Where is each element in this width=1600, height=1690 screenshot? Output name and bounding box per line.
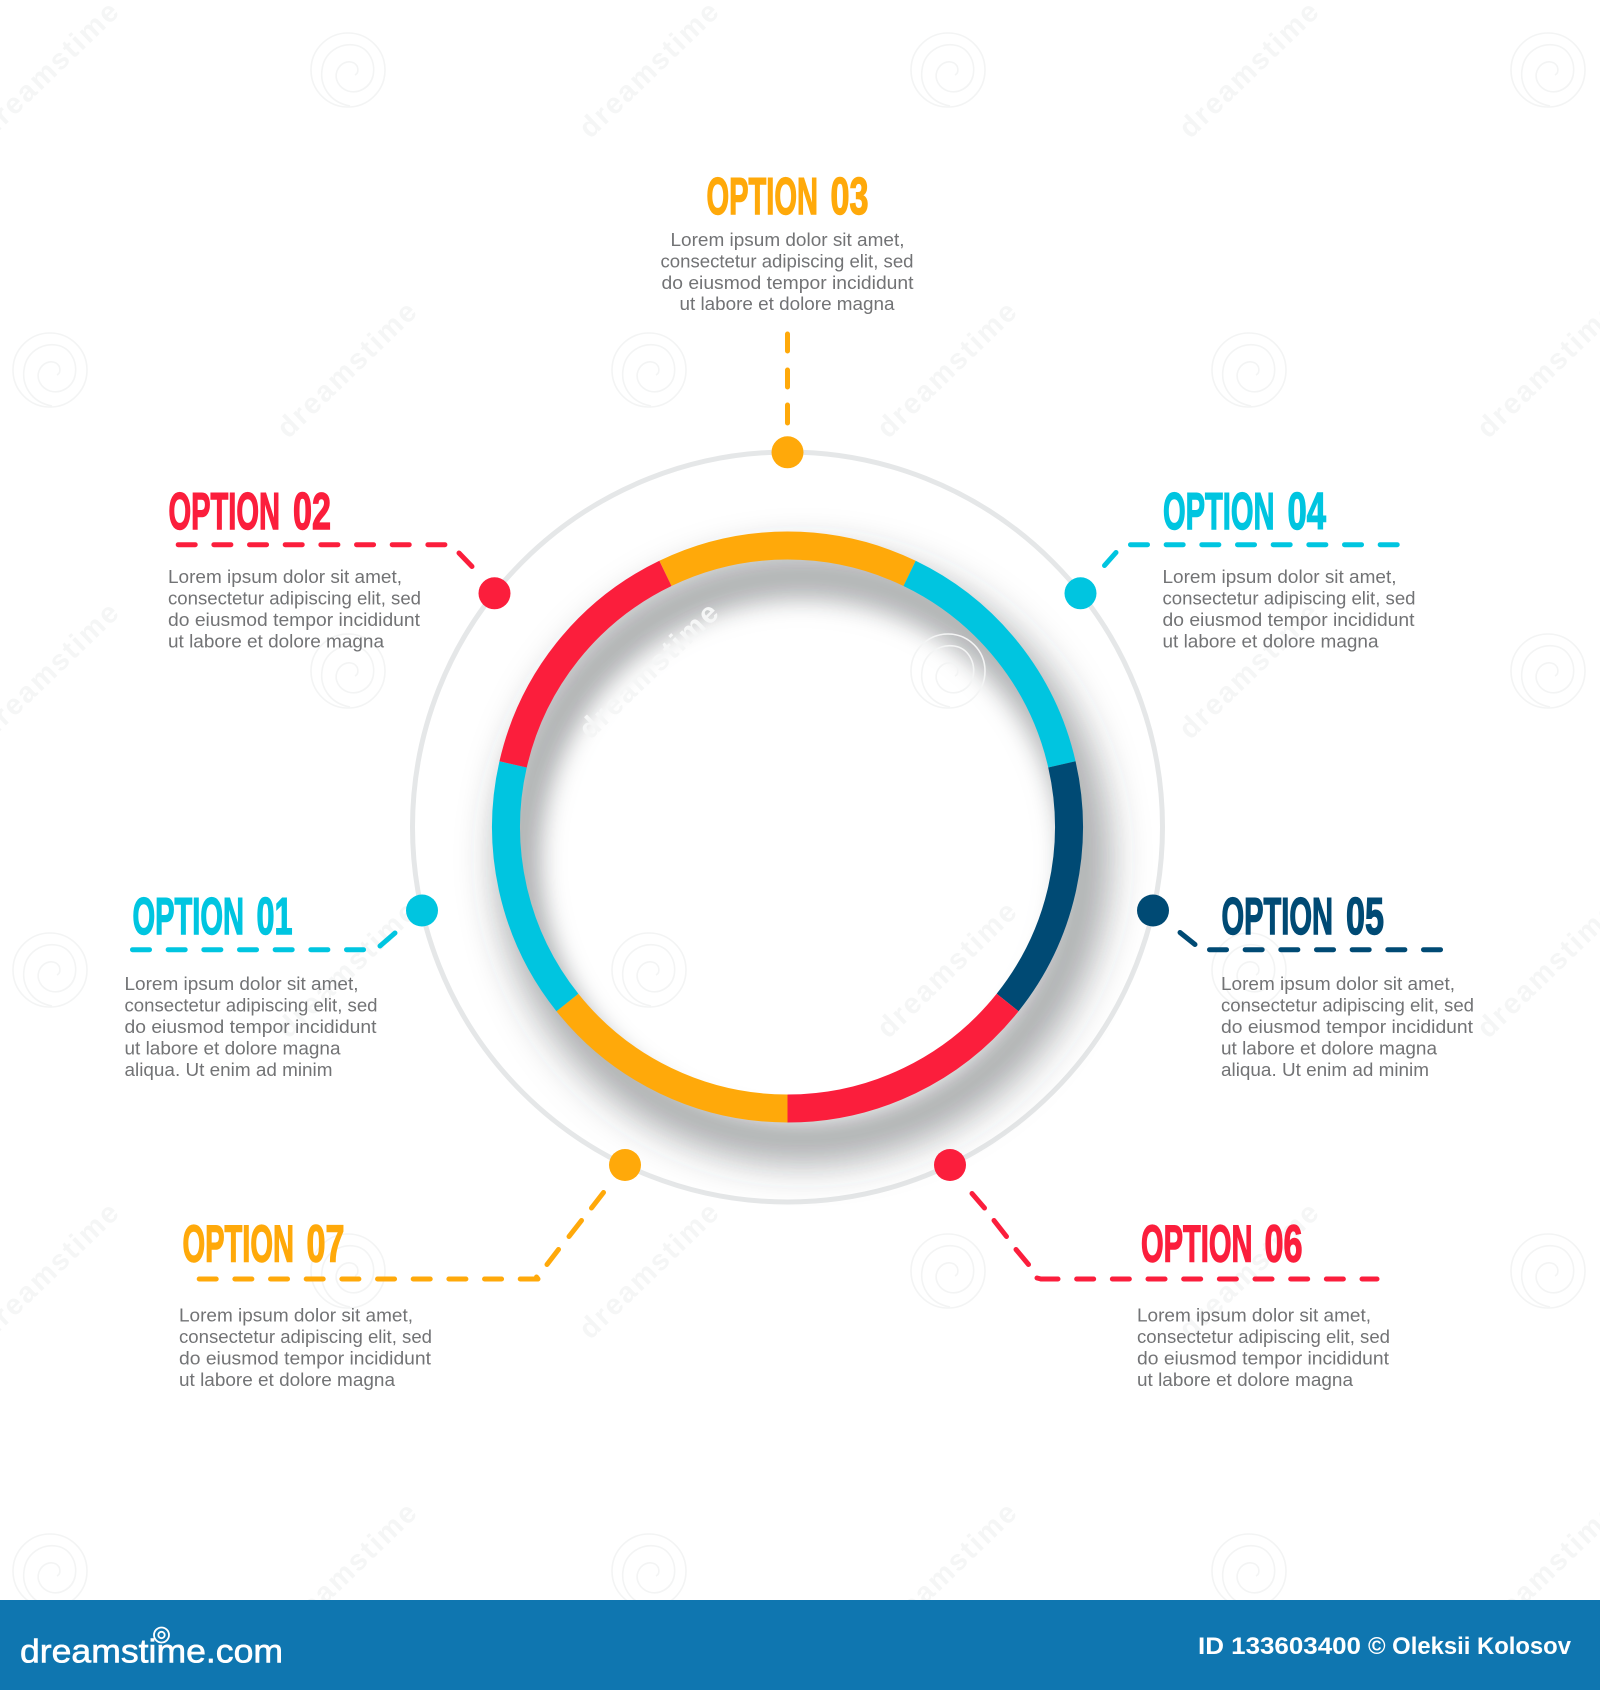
- segment: option 01: [506, 764, 567, 1002]
- connector: option 04: [1104, 545, 1399, 566]
- heading: option 07: OPTION: [182, 1214, 294, 1272]
- panel: option 07: [179, 1149, 641, 1390]
- text block: option 05: [1221, 973, 1474, 1080]
- text block: option 04: consectetur adipiscing elit, sed: [1162, 588, 1416, 608]
- heading: option 06: 06: [1264, 1214, 1302, 1272]
- panel: option 06: [934, 1149, 1390, 1390]
- heading: option 04: 04: [1288, 482, 1326, 540]
- heading: option 06: OPTION: [1141, 1214, 1252, 1272]
- text block: option 07: consectetur adipiscing elit, sed: [179, 1326, 432, 1347]
- heading: option 05: 05: [1346, 887, 1384, 945]
- text block: option 06: consectetur adipiscing elit, sed: [1137, 1326, 1390, 1347]
- text block: option 01: do eiusmod tempor incididunt: [124, 1016, 377, 1037]
- heading: option 02: OPTION: [168, 482, 280, 540]
- panel: option 04: [1064, 482, 1416, 652]
- connector: option 06: [972, 1194, 1377, 1279]
- text block: option 05: aliqua. Ut enim ad minim: [1221, 1059, 1429, 1080]
- heading: option 01: 01: [256, 887, 292, 945]
- text block: option 03: consectetur adipiscing elit, sed: [660, 250, 914, 272]
- icon: logo spiral: [154, 1628, 169, 1642]
- heading: option 05: OPTION: [1222, 887, 1333, 945]
- image credit: ID 133603400: [1198, 1633, 1361, 1660]
- segmented ring: [506, 546, 1069, 1109]
- dot: option 04: [1064, 577, 1096, 609]
- footer banner: [0, 1600, 1600, 1690]
- text block: option 03: Lorem ipsum dolor sit amet,: [670, 229, 904, 250]
- connector: option 02: [178, 545, 472, 566]
- text block: option 07: do eiusmod tempor incididunt: [179, 1348, 432, 1368]
- panel: option 05: [1137, 887, 1474, 1080]
- connector: option 03: [785, 334, 790, 423]
- segment: option 03: [665, 546, 910, 573]
- connector: option 05: [1180, 932, 1442, 950]
- text block: option 07: Lorem ipsum dolor sit amet,: [179, 1304, 413, 1326]
- text block: option 01: Lorem ipsum dolor sit amet,: [124, 973, 358, 994]
- text block: option 03: do eiusmod tempor incididunt: [662, 272, 914, 293]
- text block: option 06: Lorem ipsum dolor sit amet,: [1137, 1304, 1371, 1326]
- text block: option 02: [168, 566, 421, 652]
- text block: option 01: consectetur adipiscing elit, sed: [124, 994, 378, 1016]
- image credit: © Oleksii Kolosov: [1368, 1633, 1571, 1660]
- heading: option 07: 07: [306, 1214, 344, 1272]
- segment: option 05: [1008, 764, 1069, 1002]
- segment: option 06: [788, 1002, 1008, 1109]
- connector: option 01: [132, 933, 395, 950]
- segment: option 02: [513, 573, 665, 764]
- panel: option 02: [168, 482, 510, 652]
- text block: option 04: Lorem ipsum dolor sit amet,: [1162, 566, 1396, 587]
- text block: option 05: do eiusmod tempor incididunt: [1221, 1016, 1474, 1037]
- text block: option 04: [1162, 566, 1416, 652]
- ring shadow: [522, 576, 1084, 1138]
- dot: option 05: [1137, 894, 1169, 926]
- heading: option 03: 03: [830, 167, 868, 225]
- heading: option 01: OPTION: [132, 887, 244, 945]
- connector: option 07: [199, 1192, 603, 1279]
- text block: option 01: [124, 973, 378, 1080]
- text block: option 02: do eiusmod tempor incididunt: [168, 609, 421, 630]
- text block: option 07: ut labore et dolore magna: [179, 1369, 396, 1390]
- heading: option 02: 02: [293, 482, 331, 540]
- segment: option 04: [910, 573, 1062, 764]
- text block: option 05: ut labore et dolore magna: [1221, 1038, 1438, 1058]
- text block: option 01: ut labore et dolore magna: [124, 1038, 341, 1058]
- dot: option 07: [609, 1149, 641, 1181]
- dot: option 02: [478, 577, 510, 609]
- text block: option 06: ut labore et dolore magna: [1137, 1369, 1354, 1390]
- text block: option 02: Lorem ipsum dolor sit amet,: [168, 566, 402, 587]
- logo: dreamstime.com: dreamstime.com: [20, 1632, 283, 1670]
- text block: option 02: consectetur adipiscing elit, sed: [168, 588, 421, 608]
- text block: option 04: do eiusmod tempor incididunt: [1162, 609, 1415, 630]
- outer thin gray ring: [412, 452, 1162, 1202]
- text block: option 06: [1137, 1304, 1390, 1390]
- heading: option 03: OPTION: [706, 167, 818, 225]
- text block: option 05: Lorem ipsum dolor sit amet,: [1221, 973, 1455, 994]
- text block: option 03: ut labore et dolore magna: [680, 293, 895, 314]
- panel: option 03: [660, 167, 914, 468]
- heading: option 04: OPTION: [1163, 482, 1274, 540]
- text block: option 01: aliqua. Ut enim ad minim: [124, 1059, 332, 1080]
- text block: option 03: [660, 229, 914, 314]
- text block: option 04: ut labore et dolore magna: [1162, 630, 1379, 652]
- text block: option 07: [179, 1304, 432, 1390]
- panel: option 01: [124, 887, 438, 1080]
- image credit: [1198, 1633, 1571, 1660]
- dot: option 06: [934, 1149, 966, 1181]
- segment: option 07: [567, 1002, 788, 1108]
- text block: option 06: do eiusmod tempor incididunt: [1137, 1348, 1390, 1368]
- text block: option 05: consectetur adipiscing elit, sed: [1221, 994, 1474, 1016]
- dot: option 01: [406, 894, 438, 926]
- dot: option 03: [772, 436, 804, 468]
- text block: option 02: ut labore et dolore magna: [168, 630, 385, 652]
